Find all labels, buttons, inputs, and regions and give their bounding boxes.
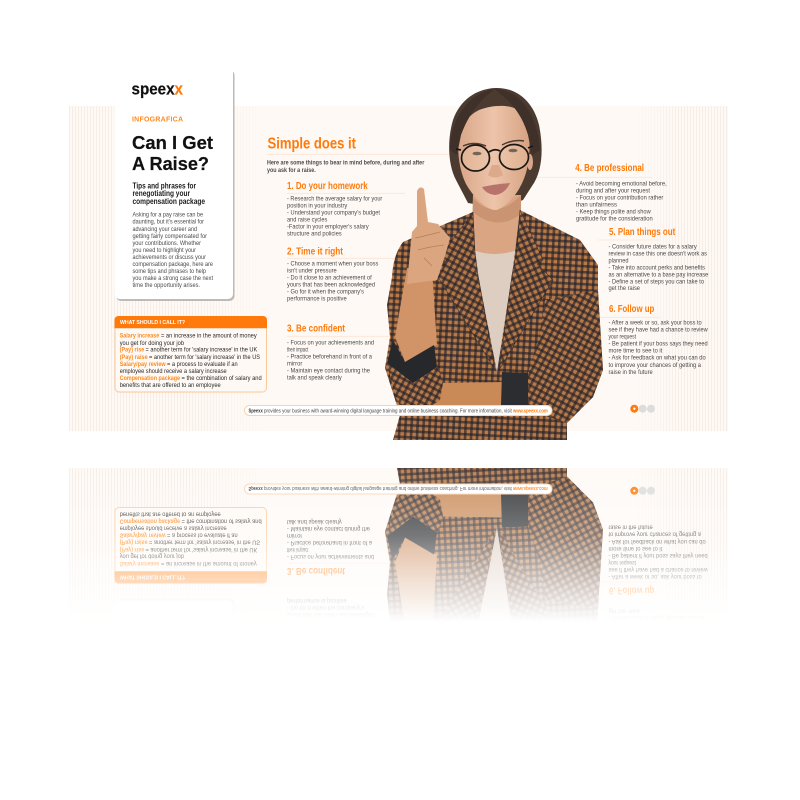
section 4: be professional: - Keep things polite and show: [576, 208, 651, 215]
reflection: = another term for 'salary increase' in the US: [149, 539, 261, 546]
neck shadow: [473, 195, 521, 223]
section 2: time it right: 2. Time it right: [287, 245, 343, 257]
subtitle: [132, 180, 205, 206]
footer pill: www.speexx.com: [512, 408, 548, 414]
reflection: you get for doing your job: [120, 553, 184, 560]
section 1: do your homework: and raise cycles: [287, 216, 328, 224]
glossary terms: = another term for 'salary increase' in the US: [149, 354, 261, 361]
reflection: provides your business with award-winning digital language training and online business coaching. For more information, visit: [264, 485, 512, 491]
section 4: be professional: gratitude for the consideration: [576, 215, 653, 222]
background band: [69, 106, 728, 431]
glossary header: WHAT SHOULD I CALL IT?: [120, 320, 185, 326]
heading: simple does it: you ask for a raise.: [267, 167, 316, 174]
title: Can I Get: [132, 132, 213, 153]
reflection: raise in the future: [608, 524, 653, 530]
footer pill: Speexx: [248, 408, 263, 414]
reflection: Salary increase: [120, 560, 160, 567]
section 3: be confident: 3. Be confident: [287, 323, 345, 335]
section 5: plan things out: planned: [608, 257, 629, 264]
reflection: mirror: [287, 532, 303, 539]
section 5: plan things out: review in case this one doesn't work as: [608, 250, 708, 257]
glossary terms: (Pay) rise: [120, 347, 145, 354]
reflection: - Go for it when the company's: [287, 604, 365, 611]
glossary terms: [120, 333, 262, 389]
raised hand: [407, 187, 450, 284]
reflection: - Maintain eye contact during the: [287, 525, 370, 532]
right cuff: [501, 372, 528, 405]
jacket: [385, 210, 603, 440]
left lapel: [438, 212, 495, 370]
section 1: do your homework: [287, 180, 405, 238]
section 3: be confident: - Practice beforehand in front of a: [287, 353, 372, 360]
section 1: do your homework: structure and policies: [287, 231, 342, 238]
heading: simple does it: Simple does it: [268, 135, 357, 152]
panel: intro card: [114, 70, 234, 301]
reflection: performance is positive: [287, 597, 347, 604]
section 6: follow up: see if they have had a chance to review: [608, 326, 708, 333]
section 1: do your homework: 1. Do your homework: [287, 180, 368, 192]
reflection: = the combination of salary and: [182, 518, 262, 525]
reflection: - Practice beforehand in front of a: [287, 539, 372, 546]
section 1: do your homework: position in your industry: [287, 203, 348, 210]
reflection: benefits that are offered to an employee: [120, 511, 221, 518]
section 3: be confident: - Maintain eye contact during the: [287, 367, 370, 374]
pagination dots: [630, 405, 655, 413]
intro text: Asking for a pay raise can be: [132, 212, 203, 219]
section 3: be confident: their impact: [287, 346, 308, 353]
reflection: - After a week or so, ask your boss to: [608, 573, 702, 580]
section 2: time it right: - Go for it when the company's: [287, 289, 365, 296]
section 2: time it right: [287, 245, 400, 303]
label: infografica: INFOGRAFICA: [132, 117, 183, 124]
glossary header: [114, 316, 267, 328]
section 6: follow up: your request: [608, 334, 636, 341]
section 6: follow up: - After a week or so, ask your boss to: [608, 319, 702, 326]
reflection: more time to see to it: [608, 545, 662, 552]
eyebrows: [463, 140, 524, 146]
glossary terms: Salary increase: [120, 333, 160, 340]
section 4: be professional: - Focus on your contribution rather: [576, 194, 664, 201]
reflection: - Be patient if your boss says they need: [608, 552, 708, 559]
right sleeve: [528, 290, 603, 423]
logo: speexx: [132, 80, 184, 98]
section 4: be professional: 4. Be professional: [575, 162, 644, 174]
reflection: their impact: [287, 546, 308, 553]
reflection: 6. Follow up: [609, 584, 654, 596]
reflection: 3. Be confident: [287, 565, 345, 577]
intro text: compensation package, here are: [132, 261, 213, 268]
right lapel: [499, 210, 553, 370]
glasses: [456, 144, 533, 171]
reflection: talk and speak clearly: [287, 518, 342, 525]
person: [385, 88, 603, 440]
intro text: you make a strong case the next: [132, 275, 213, 282]
section 4: be professional: than unfairness: [576, 201, 618, 208]
eyes: [472, 149, 518, 155]
section 5: plan things out: as an alternative to a base pay increase: [608, 271, 709, 278]
section 3: be confident: [287, 323, 392, 381]
section 1: do your homework: - Research the average salary for your: [287, 196, 383, 202]
reflection: to improve your chances of getting a: [608, 530, 701, 538]
subtitle: compensation package: [132, 196, 205, 206]
lips: [482, 183, 510, 195]
title: A Raise?: [132, 153, 209, 174]
section 5: plan things out: [598, 226, 709, 292]
intro text: time the opportunity arises.: [132, 282, 200, 289]
reflection: Salary/pay review: [120, 532, 166, 538]
glossary terms: = an increase in the amount of money: [161, 333, 257, 340]
glossary terms: (Pay) raise: [120, 354, 148, 361]
glossary terms: employee should receive a salary increase: [120, 368, 227, 375]
reflection: yours that has been acknowledged: [287, 611, 375, 618]
neck: [472, 195, 521, 256]
intro text: [132, 212, 213, 289]
subtitle: renegotiating your: [132, 188, 190, 198]
reflection: = a process to evaluate if an: [167, 532, 238, 538]
hair back: [449, 88, 542, 205]
section 2: time it right: - Choose a moment when your boss: [287, 261, 379, 268]
glossary terms: = the combination of salary and: [182, 375, 262, 382]
shirt: [473, 250, 517, 372]
panel: glossary: [114, 316, 267, 392]
section 4: be professional: [535, 162, 667, 222]
section 6: follow up: more time to see to it: [608, 348, 662, 355]
reflection: your request: [608, 559, 636, 566]
heading: simple does it: Here are some things to bear in mind before, during and after: [267, 160, 425, 166]
section 4: be professional: - Avoid becoming emotional before,: [576, 181, 667, 188]
glossary terms: = another term for 'salary increase' in the UK: [146, 347, 258, 354]
section 6: follow up: 6. Follow up: [609, 303, 654, 315]
section 6: follow up: [597, 303, 708, 376]
finger creases: [415, 232, 444, 266]
reflection: Speexx: [248, 485, 263, 491]
raised forearm: [395, 268, 437, 362]
section 2: time it right: - Do it close to an achievement of: [287, 275, 372, 282]
reflection: = an increase in the amount of money: [161, 560, 257, 567]
section 2: time it right: yours that has been acknowledged: [287, 282, 375, 289]
reflection: get the raise: [608, 608, 640, 614]
glossary terms: benefits that are offered to an employee: [120, 382, 221, 389]
intro text: your contributions. Whether: [132, 240, 202, 247]
reflection: - Focus on your achievements and: [287, 553, 374, 560]
reflection: - Define a set of steps you can take to: [608, 614, 704, 621]
reflection: = another term for 'salary increase' in the UK: [146, 546, 258, 553]
subtitle: Tips and phrases for: [132, 180, 196, 190]
left sleeve: [387, 363, 445, 416]
intro text: getting fairly compensated for: [132, 233, 208, 240]
reflection: WHAT SHOULD I CALL IT?: [120, 574, 185, 580]
section 4: be professional: during and after your request: [576, 187, 650, 194]
intro text: daunting, but it's essential for: [132, 219, 205, 226]
section 5: plan things out: get the raise: [608, 285, 640, 292]
section 6: follow up: to improve your chances of getting a: [608, 362, 701, 369]
rolled cuff: [387, 340, 437, 383]
section 2: time it right: isn't under pressure: [287, 268, 337, 275]
forearm across: [420, 382, 502, 414]
reflection: Compensation package: [120, 518, 180, 525]
section 3: be confident: talk and speak clearly: [287, 374, 342, 381]
section 1: do your homework: - Understand your company's budget: [287, 210, 380, 217]
section 5: plan things out: 5. Plan things out: [609, 226, 676, 238]
reflection: (Pay) raise: [120, 539, 148, 546]
section 2: time it right: performance is positive: [287, 296, 347, 303]
ear: [527, 154, 533, 170]
intro text: some tips and phrases to help: [132, 268, 206, 275]
section 6: follow up: raise in the future: [608, 369, 653, 376]
glossary terms: Salary/pay review: [120, 361, 166, 368]
footer pill: [244, 406, 552, 416]
reflection: - Ask for feedback on what you can do: [608, 538, 706, 545]
footer pill: provides your business with award-winning digital language training and online business coaching. For more information, visit: [264, 408, 512, 414]
heading: simple does it: [267, 135, 455, 174]
nose: [488, 165, 503, 178]
hair front: [450, 89, 540, 155]
reflection: (Pay) rise: [120, 546, 145, 553]
reflection: www.speexx.com: [512, 485, 548, 491]
section 3: be confident: - Focus on your achievements and: [287, 339, 374, 346]
section 5: plan things out: - Consider future dates for a salary: [608, 243, 697, 250]
glossary terms: = a process to evaluate if an: [167, 361, 238, 368]
glossary terms: Compensation package: [120, 375, 180, 382]
section 6: follow up: - Be patient if your boss says they need: [608, 341, 708, 348]
face: [458, 106, 530, 210]
glossary terms: you get for doing your job: [120, 340, 184, 347]
section 3: be confident: mirror: [287, 360, 303, 367]
title: [132, 132, 213, 174]
section 5: plan things out: - Take into account perks and benefits: [608, 264, 706, 271]
intro text: achievements or discuss your: [132, 254, 207, 261]
reflection: see if they have had a chance to review: [608, 566, 708, 573]
section 6: follow up: - Ask for feedback on what you can do: [608, 355, 706, 362]
reflection: employee should receive a salary increase: [120, 524, 227, 532]
intro text: advancing your career and: [132, 226, 197, 233]
section 5: plan things out: - Define a set of steps you can take to: [608, 278, 704, 285]
section 1: do your homework: -Factor in your employer's salary: [287, 224, 369, 231]
reflection: [69, 468, 728, 616]
intro text: you need to highlight your: [132, 247, 197, 254]
